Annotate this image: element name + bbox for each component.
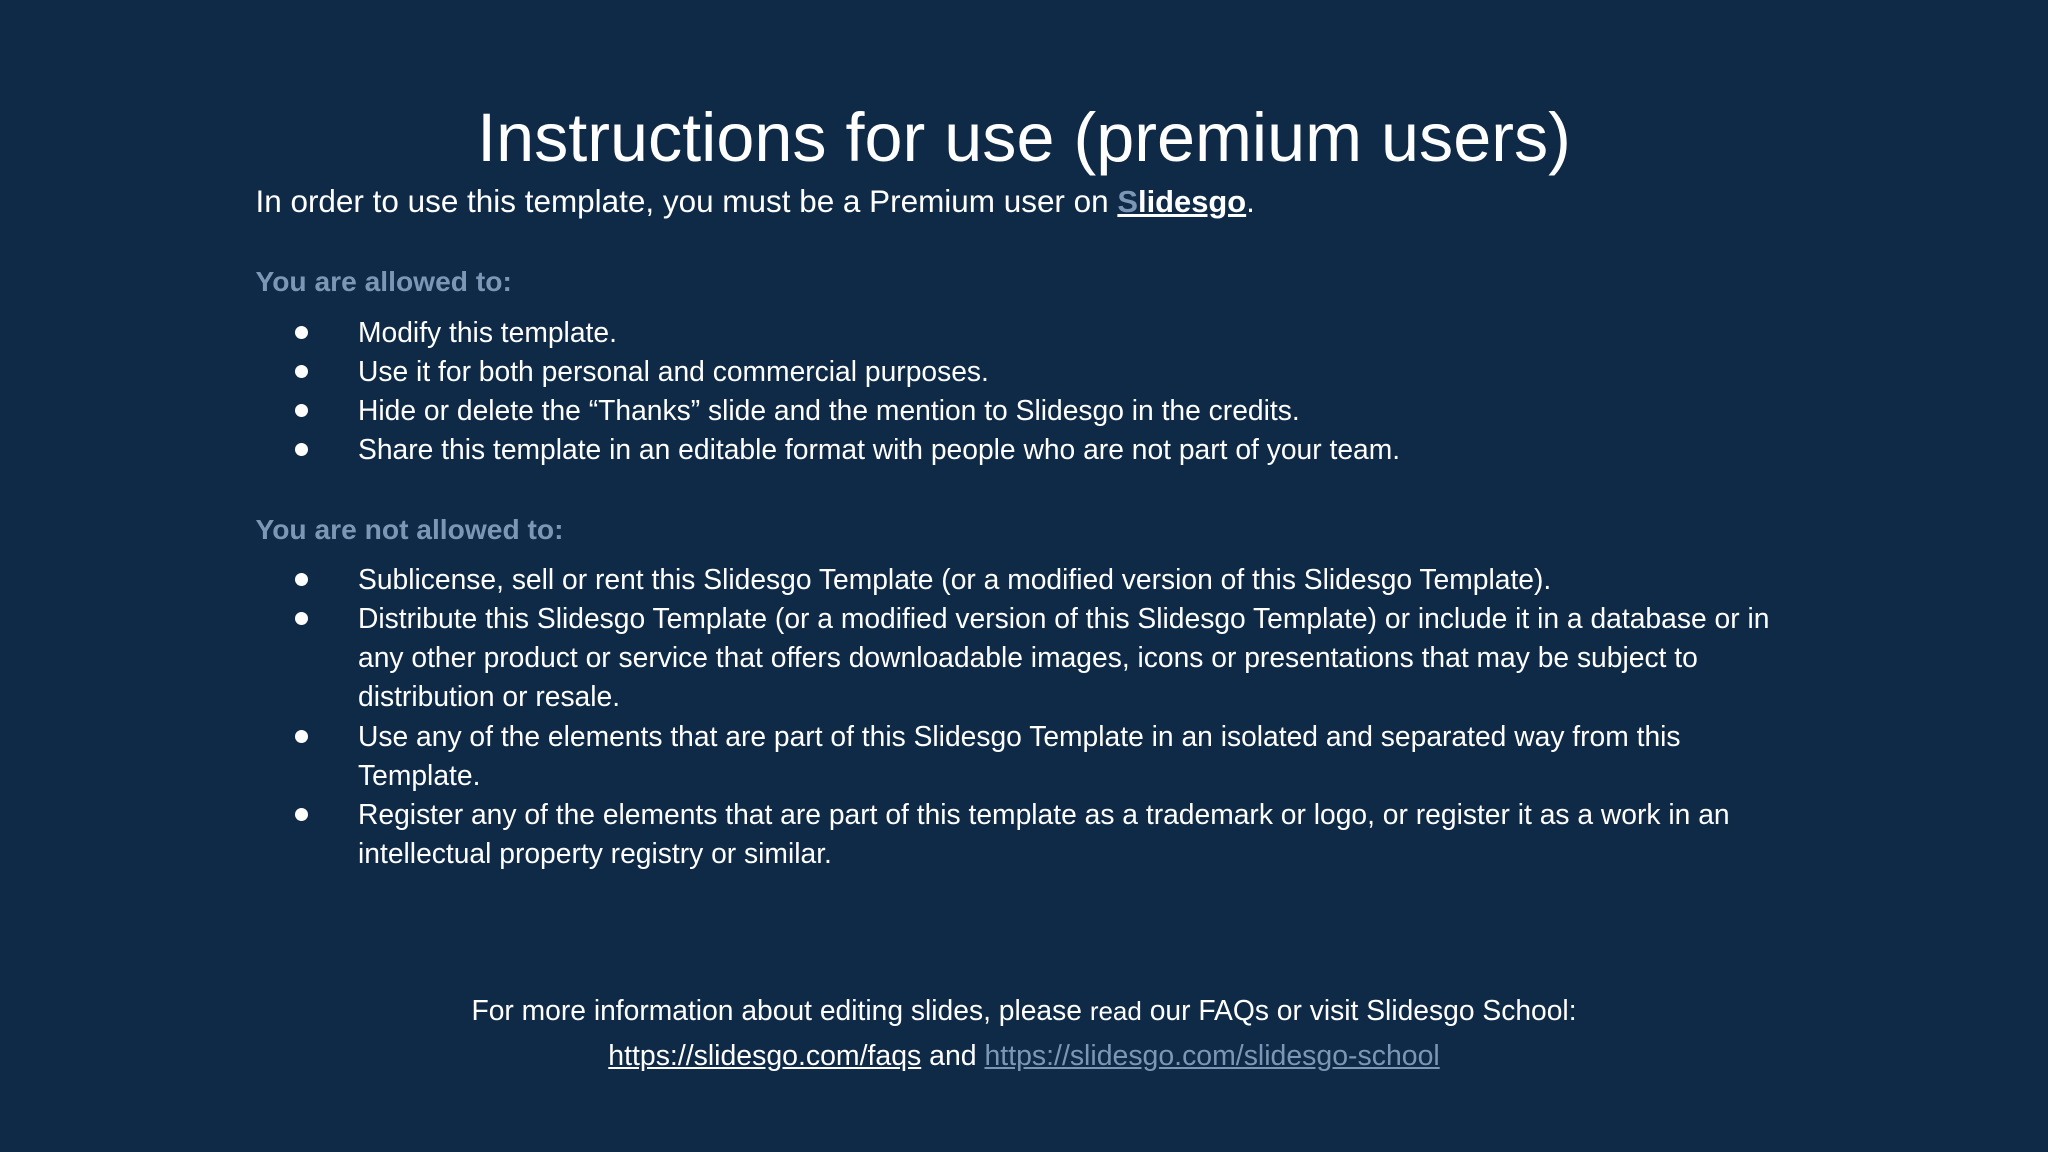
bullet item: register: Register any of the elements that are part of this template as a trademark or logo, or register it as a work in an: [358, 798, 1730, 830]
bullet item: distribute: Distribute this Slidesgo Template (or a modified version of this Slidesgo Template) or include it in a database or in: [358, 602, 1769, 634]
bullet item: modify: Modify this template.: [358, 316, 617, 348]
list: allowed: [295, 316, 1400, 465]
bullet item: distribute: any other product or service that offers downloadable images, icons or presentations that may be subject to: [358, 641, 1698, 673]
bullet item: register: [295, 798, 1730, 869]
footer text: For more information about editing slides, please read our FAQs or visit Slidesgo School:: [471, 994, 1577, 1026]
bullet item: hide: Hide or delete the “Thanks” slide and the mention to Slidesgo in the credits.: [358, 394, 1300, 426]
heading: allowed: You are allowed to:: [256, 265, 512, 297]
footer text: https://slidesgo.com/faqs and https://slidesgo.com/slidesgo-school: [608, 1040, 1440, 1072]
title: Instructions for use (premium users): [477, 100, 1571, 176]
bullet item: use: Use it for both personal and commercial purposes.: [358, 355, 989, 387]
bullet item: register: intellectual property registry or similar.: [358, 837, 832, 869]
bullet item: elements: Use any of the elements that are part of this Slidesgo Template in an isolated and separated way from this: [358, 720, 1681, 752]
bullet item: sublicense: Sublicense, sell or rent this Slidesgo Template (or a modified version of this Slidesgo Template).: [358, 563, 1551, 595]
bullet item: elements: [295, 720, 1681, 791]
bullet item: distribute: [295, 602, 1769, 712]
intro text: In order to use this template, you must be a Premium user on Slidesgo.: [256, 184, 1255, 219]
bullet item: distribute: distribution or resale.: [358, 680, 620, 712]
list: not allowed: [295, 563, 1769, 869]
heading: not allowed: You are not allowed to:: [256, 512, 563, 544]
footer text: [471, 994, 1577, 1072]
bullet item: share: Share this template in an editable format with people who are not part of your team.: [358, 433, 1400, 465]
bullet item: elements: Template.: [358, 759, 480, 791]
